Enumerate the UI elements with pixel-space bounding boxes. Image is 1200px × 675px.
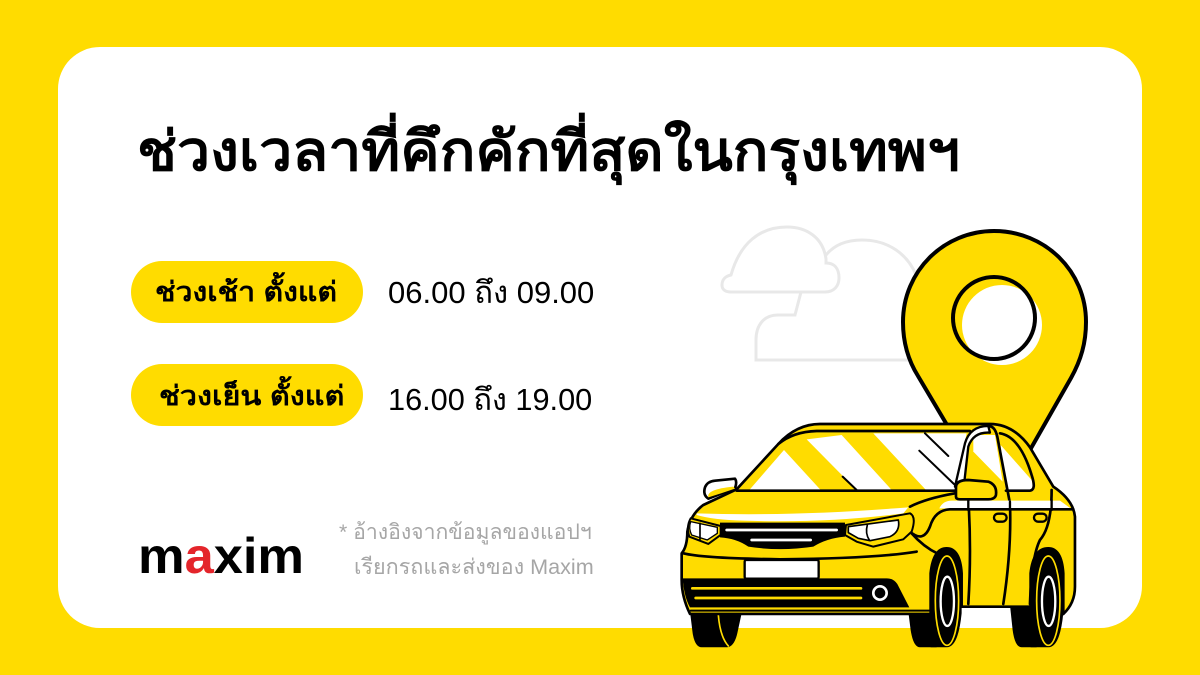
lower front tyres <box>690 605 1037 647</box>
headlights <box>688 518 721 544</box>
pill: evening label <box>131 364 363 426</box>
pill: morning label <box>131 261 363 323</box>
A-pillar <box>955 426 990 487</box>
panel: white card <box>58 47 1142 628</box>
car body <box>682 424 1075 614</box>
side window glass <box>973 435 1034 491</box>
title: ช่วงเวลาที่คึกคักที่สุดในกรุงเทพฯ <box>137 120 960 182</box>
icon: location pin <box>903 231 1086 450</box>
footnote: เรียกรถและส่งของ Maxim <box>354 554 594 579</box>
footnote <box>339 521 594 579</box>
license plate <box>745 560 819 579</box>
text: evening hours: 16.00 ถึง 19.00 <box>388 382 592 417</box>
grille <box>720 523 845 549</box>
lower bumper <box>683 578 909 607</box>
logo: maxim: maxim <box>138 528 304 584</box>
body lines <box>683 493 1073 559</box>
text: morning label: ช่วงเช้า ตั้งแต่ <box>155 277 337 307</box>
door handles <box>994 514 1007 522</box>
door frame and side lines <box>968 426 1052 604</box>
side mirror right <box>956 480 996 499</box>
wheel arches and wheels <box>931 548 1063 647</box>
icon: yellow car <box>682 424 1075 647</box>
icon: background clouds <box>722 227 916 360</box>
white body stripes <box>939 501 1071 508</box>
side mirror left <box>704 479 736 499</box>
footnote: * อ้างอิงจากข้อมูลของแอปฯ <box>339 521 592 544</box>
windshield <box>737 433 967 491</box>
roof line <box>778 431 970 444</box>
text: evening label: ช่วงเย็น ตั้งแต่ <box>159 381 344 411</box>
text: morning hours: 06.00 ถึง 09.00 <box>388 275 594 310</box>
